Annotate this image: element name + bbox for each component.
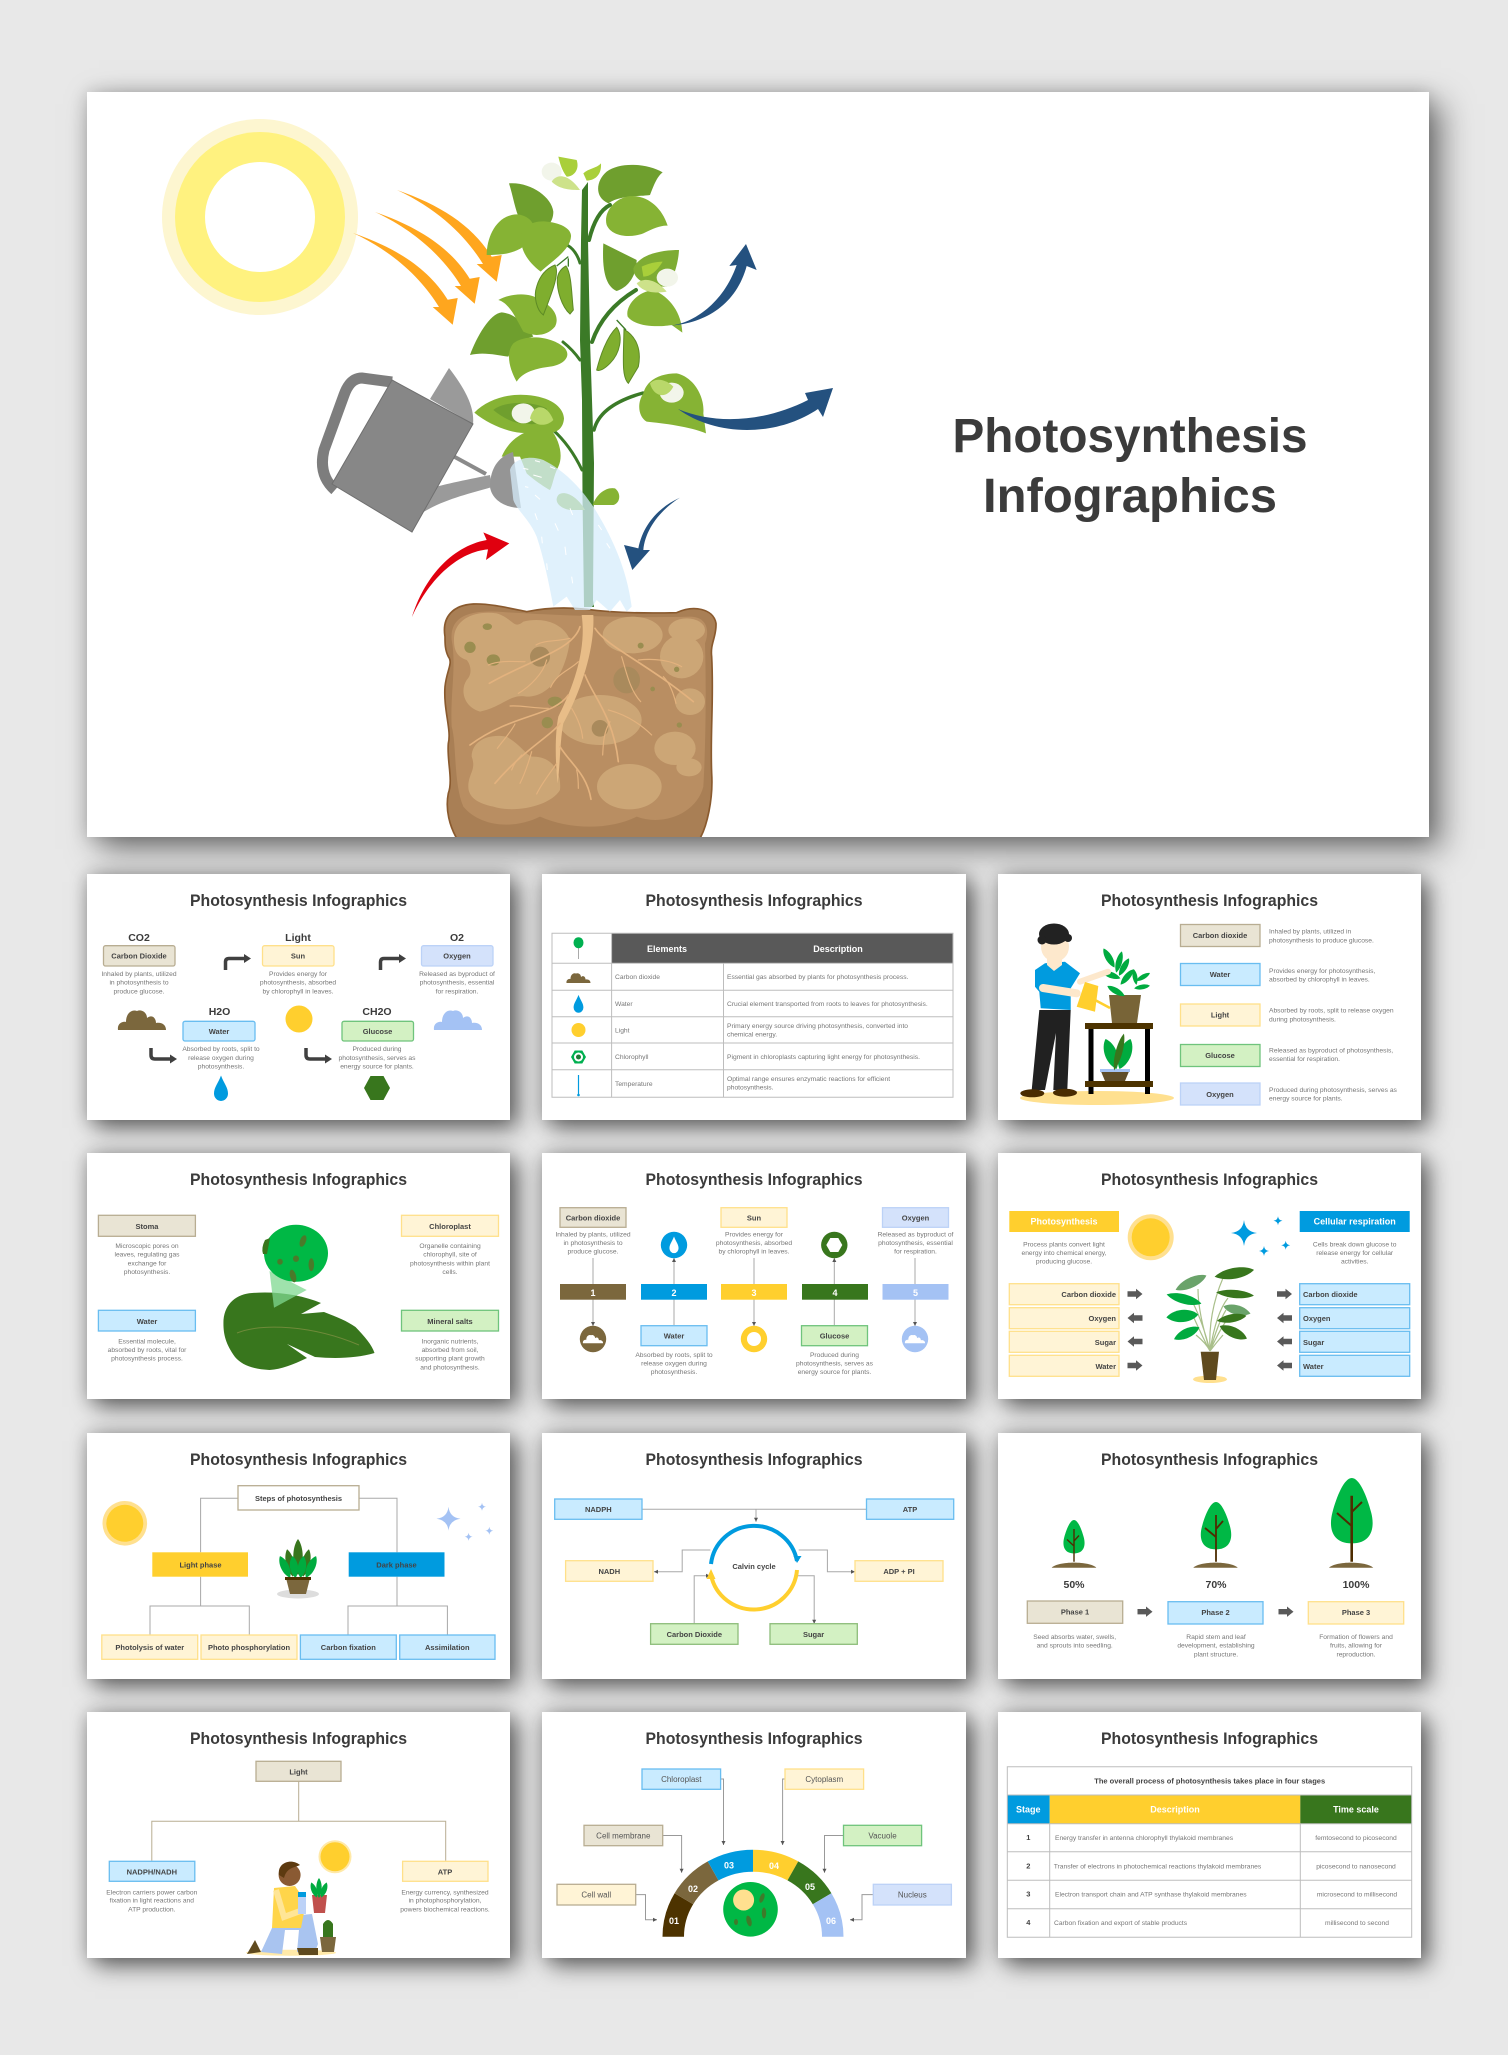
icon: sun: [102, 1501, 147, 1546]
phase 2: 70%: [1205, 1579, 1227, 1591]
icon: cell: [723, 1882, 778, 1937]
column: cellular respiration: [1300, 1211, 1410, 1376]
panel: steps of photosynthesis tree: [87, 1433, 510, 1679]
table: 4: [1026, 1918, 1031, 1927]
node: light phase: [152, 1552, 248, 1577]
item: Light: Light: [285, 932, 311, 944]
phase 1: Phase 1: [1061, 1608, 1089, 1616]
phase 1: Seed absorbs water, swells,: [1033, 1634, 1116, 1641]
label: cell wall: [557, 1884, 636, 1905]
heading: Photosynthesis Infographics: [646, 1451, 862, 1469]
column: cellular respiration: Carbon dioxide: [1303, 1290, 1358, 1299]
icon: potted plant: [276, 1539, 320, 1598]
item: chloroplast: photosynthesis within plant: [410, 1260, 490, 1267]
step 3: Provides energy for: [725, 1231, 784, 1238]
item: Light: Sun: [291, 952, 305, 960]
table: 3: [1026, 1890, 1030, 1899]
item: stoma: Stoma: [136, 1222, 159, 1231]
panel: elements cycle: [87, 874, 510, 1120]
item: CH2O: energy source for plants.: [340, 1064, 414, 1070]
icon: sun: [318, 1840, 352, 1873]
label: cell wall: Cell wall: [581, 1890, 611, 1900]
step 4: Produced during: [810, 1352, 859, 1359]
phase 1: 50%: [1063, 1579, 1085, 1591]
illustration: leaf with magnified cell: [223, 1225, 374, 1370]
chart: arc segments: [662, 1850, 844, 1937]
table: Optimal range ensures enzymatic reactions for efficient: [727, 1076, 890, 1083]
item: O2: photosynthesis, essential: [420, 980, 495, 987]
illustration: potted plant: [1165, 1264, 1255, 1383]
icon: sun: [1128, 1214, 1174, 1260]
panel: plant cell arc: [542, 1712, 966, 1958]
connector lines: column 3: [753, 1258, 755, 1326]
node: root: Steps of photosynthesis: [255, 1494, 342, 1503]
leaf nodes: Carbon fixation: [321, 1643, 376, 1652]
step 5: Released as byproduct of: [878, 1231, 954, 1238]
icon: plant stem and branches: [553, 182, 643, 607]
phase 2: [1168, 1502, 1263, 1658]
list: light: during photosynthesis.: [1269, 1016, 1336, 1023]
node: Sugar: Sugar: [803, 1630, 824, 1639]
node: NADPH: NADPH: [585, 1505, 612, 1514]
list: water: absorbed by chlorophyll in leaves.: [1269, 977, 1370, 984]
label: chloroplast: Chloroplast: [661, 1775, 702, 1784]
item: O2: for respiration.: [436, 988, 479, 995]
connector: NADH: [654, 1550, 710, 1572]
step 1: in photosynthesis to: [563, 1240, 623, 1247]
phase 3: Formation of flowers and: [1319, 1634, 1393, 1641]
item: H2O: H2O: [209, 1006, 230, 1018]
table: Carbon dioxide: [615, 974, 660, 981]
icon: stars: [436, 1503, 493, 1541]
arrow: blue right: [678, 388, 833, 430]
item: mineral salts: Inorganic nutrients,: [422, 1338, 479, 1345]
column: photosynthesis: energy into chemical energy,: [1021, 1250, 1107, 1257]
step 4: [796, 1232, 874, 1376]
node: NADPH: [555, 1499, 642, 1519]
icon: watering can: [322, 368, 521, 532]
item: Light: by chlorophyll in leaves.: [262, 988, 334, 995]
column: photosynthesis: producing glucose.: [1036, 1259, 1092, 1266]
connector lines: column 2: [673, 1258, 675, 1325]
column: photosynthesis: Oxygen: [1088, 1314, 1116, 1323]
label: nucleus: Nucleus: [898, 1890, 927, 1900]
icon: sun: [162, 119, 358, 315]
arrow: blue upper right: [670, 244, 757, 326]
title: Photosynthesis: [952, 410, 1308, 463]
item: O2: [419, 932, 495, 1030]
list: water: Provides energy for photosynthesis,: [1269, 968, 1375, 975]
list: oxygen: [1180, 1083, 1398, 1105]
phase 1: and sprouts into seedling.: [1037, 1643, 1113, 1650]
item: stoma: leaves, regulating gas: [114, 1252, 180, 1259]
step 5: 5: [913, 1288, 918, 1298]
item: CH2O: CH2O: [362, 1006, 392, 1018]
item: O2: O2: [450, 932, 464, 944]
table: Time scale: [1333, 1805, 1379, 1815]
table: [1007, 1767, 1412, 1937]
table: Description: [1150, 1805, 1200, 1815]
step 5: for respiration.: [894, 1249, 937, 1256]
table: Crucial element transported from roots to leaves for photosynthesis.: [727, 1001, 928, 1008]
illustration: kneeling person with plants: [246, 1862, 336, 1956]
node: ATP: [866, 1499, 954, 1519]
chart: arc segments: 06: [826, 1916, 836, 1926]
chart: Calvin cycle ring: Calvin cycle: [732, 1562, 776, 1571]
table: 2: [1026, 1861, 1030, 1870]
list: water: Water: [1210, 970, 1230, 979]
step 1: produce glucose.: [568, 1249, 619, 1256]
title: [952, 410, 1308, 523]
phase 3: fruits, allowing for: [1330, 1643, 1383, 1650]
icon: stars: [1231, 1216, 1290, 1256]
title: Infographics: [983, 470, 1277, 523]
step 4: photosynthesis, serves as: [796, 1361, 874, 1368]
step 2: Absorbed by roots, split to: [635, 1352, 713, 1359]
item: mineral salts: Mineral salts: [427, 1317, 473, 1326]
phase 3: 100%: [1343, 1579, 1370, 1591]
step 3: Sun: [747, 1214, 761, 1222]
arrows: [1138, 1606, 1294, 1617]
panel: Calvin cycle: [542, 1433, 966, 1679]
heading: Photosynthesis Infographics: [646, 1171, 862, 1189]
column: cellular respiration: Sugar: [1303, 1338, 1324, 1347]
connector lines: column 5: [914, 1258, 916, 1326]
item: H2O: [182, 1006, 260, 1101]
item: CO2: [101, 932, 177, 1030]
chart: arc segments: 04: [769, 1861, 779, 1871]
leaf nodes: Assimilation: [425, 1643, 470, 1652]
item: chloroplast: chlorophyll, site of: [423, 1252, 477, 1259]
table: Carbon fixation and export of stable products: [1054, 1920, 1188, 1927]
table: Essential gas absorbed by plants for photosynthesis process.: [727, 974, 909, 981]
node: light phase: Light phase: [179, 1560, 222, 1570]
icon: water stream: [510, 458, 632, 612]
step 4: 4: [832, 1288, 838, 1298]
item: stoma: [98, 1215, 195, 1276]
list: oxygen: energy source for plants.: [1269, 1096, 1343, 1103]
phase 2: Rapid stem and leaf: [1186, 1634, 1246, 1641]
list: carbon dioxide: [1180, 924, 1374, 946]
connector lines: [636, 1779, 873, 1920]
item: chloroplast: Organelle containing: [419, 1243, 481, 1250]
item: CO2: Carbon Dioxide: [111, 952, 167, 960]
step 1: [555, 1208, 631, 1352]
table: Electron transport chain and ATP synthase thylakoid membranes: [1055, 1892, 1247, 1899]
label: cell membrane: Cell membrane: [596, 1832, 651, 1840]
panel: light, NADPH and ATP: [87, 1712, 510, 1958]
step 3: 3: [751, 1288, 757, 1298]
item: CH2O: photosynthesis, serves as: [339, 1055, 416, 1062]
step 2: [635, 1232, 713, 1376]
heading: Photosynthesis Infographics: [646, 1730, 862, 1748]
node: NADPH/NADH: Electron carriers power carbon: [106, 1889, 198, 1896]
item: Light: Provides energy for: [269, 971, 328, 978]
illustration: person watering plant: [1020, 924, 1174, 1105]
panel: four stages table: [998, 1712, 1421, 1958]
step 2: release oxygen during: [641, 1361, 707, 1368]
table: The overall process of photosynthesis takes place in four stages: [1094, 1776, 1325, 1785]
node: ATP: powers biochemical reactions.: [400, 1906, 490, 1913]
arrows: [1128, 1289, 1292, 1371]
column: cellular respiration: release energy for cellular: [1316, 1250, 1394, 1257]
icon: soil block: [444, 604, 716, 838]
list: glucose: essential for respiration.: [1269, 1056, 1340, 1063]
item: stoma: Microscopic pores on: [115, 1243, 179, 1250]
icon: upper plant leaves: [470, 157, 682, 383]
step 5: photosynthesis, essential: [878, 1240, 953, 1247]
column: photosynthesis: Photosynthesis: [1030, 1216, 1098, 1226]
chart: arc segments: 02: [688, 1884, 698, 1894]
step 4: Glucose: [820, 1332, 849, 1340]
table: Water: [615, 1001, 633, 1008]
table: chemical energy.: [727, 1032, 777, 1038]
list: carbon dioxide: Carbon dioxide: [1193, 931, 1247, 940]
table: microsecond to millisecond: [1317, 1892, 1397, 1899]
step 3: photosynthesis, absorbed: [716, 1240, 792, 1247]
list: glucose: Released as byproduct of photosynthesis,: [1269, 1047, 1393, 1054]
panel: five steps timeline: [542, 1153, 966, 1399]
list: carbon dioxide: Inhaled by plants, utilized in: [1269, 928, 1351, 935]
node: light: [256, 1761, 341, 1781]
heading: Photosynthesis Infographics: [1101, 1730, 1318, 1748]
panel: gardener and element list: [998, 874, 1421, 1120]
item: H2O: release oxygen during: [188, 1055, 254, 1062]
item: mineral salts: and photosynthesis.: [420, 1364, 480, 1371]
arrow: red: [412, 532, 509, 617]
phase 2: development, establishing: [1177, 1643, 1255, 1650]
item: CO2: CO2: [128, 932, 150, 944]
node: NADPH/NADH: [106, 1861, 198, 1913]
table: [552, 933, 953, 1097]
node: Carbon Dioxide: [651, 1624, 738, 1644]
node: ATP: ATP: [903, 1505, 917, 1514]
leaf nodes: Photo phosphorylation: [208, 1643, 290, 1652]
column: photosynthesis: Carbon dioxide: [1061, 1290, 1116, 1299]
node: Carbon Dioxide: Carbon Dioxide: [667, 1630, 722, 1639]
item: stoma: photosynthesis.: [124, 1269, 170, 1276]
phase 3: reproduction.: [1336, 1651, 1376, 1658]
column: cellular respiration: Oxygen: [1303, 1314, 1331, 1323]
panel: elements table: [542, 874, 966, 1120]
chart: Calvin cycle ring: [706, 1526, 802, 1610]
label: cytoplasm: [785, 1769, 864, 1789]
arrows: elbow connectors: [151, 954, 406, 1064]
table: Description: [813, 944, 863, 954]
node: root: [238, 1486, 359, 1510]
column: cellular respiration: Cellular respiration: [1314, 1216, 1396, 1226]
node: ATP: in photophosphorylation,: [409, 1898, 482, 1905]
node: NADPH/NADH: NADPH/NADH: [127, 1868, 177, 1876]
arrows: sunlight: [353, 190, 502, 325]
table: Pigment in chloroplasts capturing light energy for photosynthesis.: [727, 1054, 920, 1061]
column: photosynthesis: Sugar: [1095, 1338, 1116, 1347]
node: dark phase: Dark phase: [376, 1560, 417, 1570]
heading: Photosynthesis Infographics: [190, 1730, 407, 1748]
step 1: Carbon dioxide: [566, 1214, 620, 1222]
item: mineral salts: absorbed from soil,: [422, 1347, 479, 1354]
heading: Photosynthesis Infographics: [1101, 1451, 1318, 1469]
step 1: 1: [590, 1288, 596, 1298]
item: stoma: exchange for: [128, 1260, 167, 1267]
list: glucose: [1180, 1044, 1393, 1066]
column: cellular respiration: Water: [1303, 1362, 1324, 1371]
column: photosynthesis: [1009, 1211, 1119, 1376]
table: Temperature: [615, 1081, 653, 1088]
column: photosynthesis: Water: [1095, 1362, 1116, 1371]
item: mineral salts: supporting plant growth: [415, 1356, 485, 1363]
node: NADH: NADH: [598, 1567, 620, 1576]
heading: Photosynthesis Infographics: [190, 1171, 407, 1189]
column: cellular respiration: activities.: [1341, 1259, 1369, 1266]
chart: arc segments: 01: [669, 1916, 679, 1926]
item: H2O: photosynthesis.: [198, 1064, 244, 1070]
step 5: [878, 1208, 954, 1352]
item: CH2O: Glucose: [363, 1027, 392, 1036]
item: H2O: Water: [209, 1027, 229, 1036]
label: cell membrane: [584, 1825, 663, 1846]
table: Primary energy source driving photosynthesis, converted into: [727, 1023, 908, 1030]
item: H2O: Absorbed by roots, split to: [182, 1046, 260, 1053]
heading: Photosynthesis Infographics: [1101, 1171, 1318, 1189]
chart: arc segments: 05: [805, 1882, 815, 1892]
list: light: Light: [1211, 1010, 1230, 1020]
item: water: Water: [137, 1317, 157, 1326]
item: water: photosynthesis process.: [111, 1356, 183, 1363]
heading: Photosynthesis Infographics: [190, 1451, 407, 1469]
connector lines: [642, 1509, 866, 1522]
phase 2: plant structure.: [1194, 1651, 1238, 1658]
item: water: Essential molecule,: [118, 1338, 176, 1345]
node: Sugar: [770, 1624, 857, 1644]
table: millisecond to second: [1325, 1920, 1389, 1927]
icon: lower plant leaves: [474, 373, 706, 510]
step 5: Oxygen: [902, 1214, 930, 1222]
table: Stage: [1016, 1805, 1041, 1815]
table: Transfer of electrons in photochemical reactions thylakoid membranes: [1054, 1863, 1262, 1870]
column: photosynthesis: Process plants convert light: [1023, 1241, 1105, 1248]
panel: photosynthesis vs cellular respiration: [998, 1153, 1421, 1399]
item: CH2O: [339, 1006, 416, 1100]
list: water: [1180, 964, 1375, 986]
item: O2: Oxygen: [443, 952, 471, 960]
panel: growth phases: [998, 1433, 1421, 1679]
list: glucose: Glucose: [1205, 1051, 1235, 1060]
chart: arc segments: 03: [724, 1860, 734, 1870]
label: cytoplasm: Cytoplasm: [805, 1775, 844, 1784]
node: dark phase: [349, 1552, 444, 1577]
table: photosynthesis.: [727, 1084, 774, 1092]
table: picosecond to nanosecond: [1316, 1863, 1396, 1870]
connector: carbon dioxide: [694, 1576, 710, 1624]
item: water: absorbed by roots, vital for: [108, 1347, 187, 1354]
list: oxygen: Oxygen: [1206, 1090, 1234, 1099]
list: light: Absorbed by roots, split to release oxygen: [1269, 1008, 1394, 1015]
table: Elements: [647, 944, 687, 954]
node: NADH: [566, 1561, 653, 1581]
list: light: [1180, 1004, 1394, 1026]
item: Light: photosynthesis, absorbed: [260, 980, 336, 987]
item: chloroplast: [402, 1215, 498, 1276]
step 1: Inhaled by plants, utilized: [555, 1231, 631, 1238]
step 3: by chlorophyll in leaves.: [718, 1249, 790, 1256]
phase 1: [1027, 1520, 1123, 1650]
node: ATP: Energy currency, synthesized: [401, 1889, 489, 1896]
table: Light: [615, 1028, 630, 1034]
node: NADPH/NADH: fixation in light reactions and: [110, 1898, 194, 1905]
connector: sugar: [798, 1576, 814, 1624]
step 2: 2: [671, 1288, 677, 1298]
item: CO2: Inhaled by plants, utilized: [101, 971, 177, 978]
connector lines: column 4: [833, 1258, 835, 1325]
label: vacuole: [844, 1825, 922, 1846]
item: CO2: produce glucose.: [114, 988, 165, 995]
label: chloroplast: [642, 1769, 721, 1789]
item: mineral salts: [402, 1310, 498, 1371]
table: 1: [1026, 1833, 1030, 1842]
leaf nodes: Photolysis of water: [115, 1643, 184, 1652]
panel: leaf zoom: [87, 1153, 510, 1399]
panel: main hero slide: [87, 92, 1429, 837]
connector lines: [592, 1258, 594, 1326]
step 3: [716, 1208, 792, 1352]
step 4: energy source for plants.: [798, 1369, 871, 1376]
column: cellular respiration: Cells break down glucose to: [1313, 1241, 1397, 1248]
item: CH2O: Produced during: [352, 1046, 402, 1053]
connector lines: [150, 1498, 447, 1635]
icon: roots: [470, 615, 693, 799]
item: water: [98, 1310, 195, 1363]
icons: table rows: [566, 937, 590, 1096]
item: Light: [260, 932, 336, 1032]
connector lines: [152, 1781, 446, 1861]
item: CO2: in photosynthesis to: [109, 980, 169, 987]
connector: ADP: [799, 1550, 855, 1572]
item: O2: Released as byproduct of: [419, 971, 495, 978]
table: femtosecond to picosecond: [1315, 1835, 1397, 1842]
phase 3: Phase 3: [1342, 1608, 1370, 1617]
arrow: blue down: [624, 498, 680, 570]
node: ADP + PI: [855, 1561, 943, 1581]
node: ADP + PI: ADP + PI: [883, 1567, 915, 1576]
item: chloroplast: cells.: [442, 1269, 458, 1276]
node: ATP: [400, 1861, 490, 1913]
table: Chlorophyll: [615, 1054, 649, 1061]
table: Energy transfer in antenna chlorophyll thylakoid membranes: [1055, 1835, 1234, 1842]
label: nucleus: [873, 1884, 951, 1905]
step 2: Water: [664, 1332, 684, 1340]
node: NADPH/NADH: ATP production.: [128, 1906, 176, 1913]
phase 3: [1308, 1478, 1404, 1658]
step 2: photosynthesis.: [651, 1369, 697, 1376]
node: light: Light: [289, 1768, 308, 1776]
node: ATP: ATP: [438, 1868, 452, 1876]
label: vacuole: Vacuole: [868, 1832, 897, 1840]
list: oxygen: Produced during photosynthesis, serves as: [1269, 1087, 1398, 1094]
leaf nodes: [102, 1635, 495, 1659]
list: carbon dioxide: photosynthesis to produce glucose.: [1269, 937, 1374, 944]
phase 2: Phase 2: [1201, 1608, 1230, 1617]
heading: Photosynthesis Infographics: [190, 892, 407, 910]
heading: Photosynthesis Infographics: [1101, 892, 1318, 910]
item: chloroplast: Chloroplast: [429, 1222, 471, 1231]
heading: Photosynthesis Infographics: [646, 892, 862, 910]
